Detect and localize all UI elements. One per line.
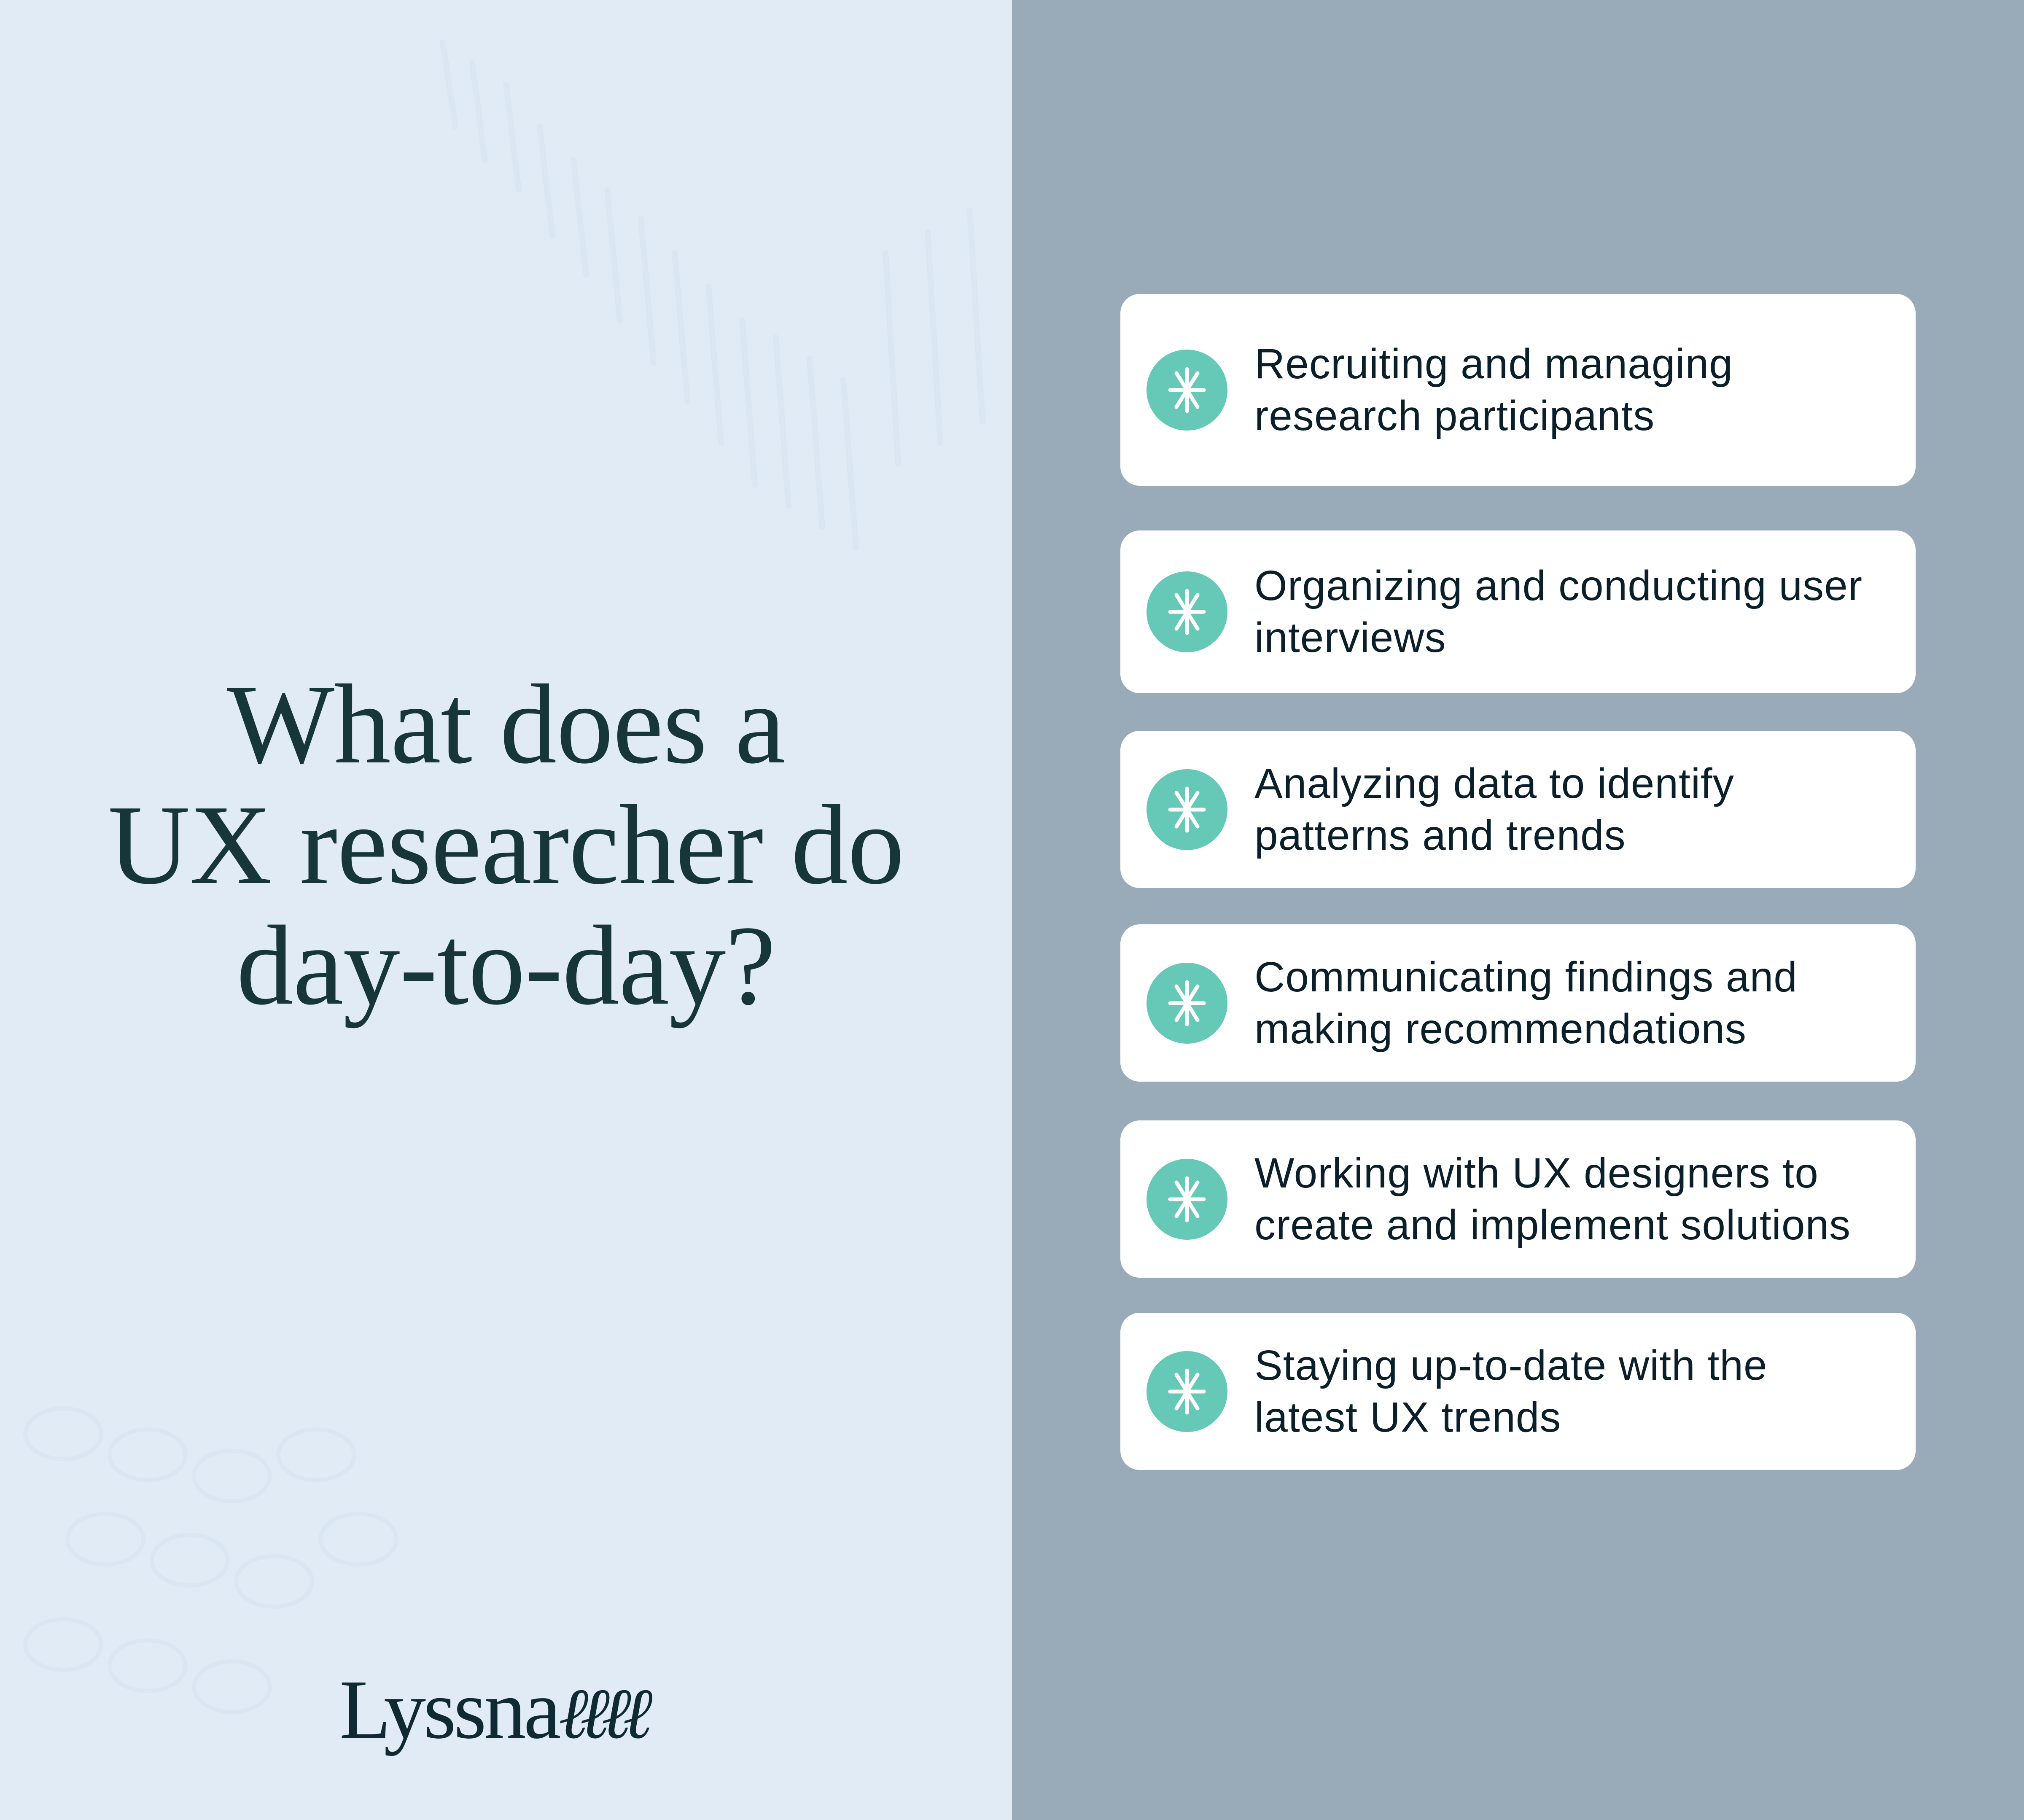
- text: Working with UX designers to: [1254, 1150, 1819, 1197]
- icon: asterisk: [1147, 962, 1227, 1043]
- text: [1254, 757, 1734, 861]
- text: create and implement solutions: [1254, 1201, 1851, 1248]
- card 5: [1120, 1120, 1916, 1278]
- text: Staying up-to-date with the: [1254, 1342, 1768, 1389]
- decorative hatch pattern: [0, 0, 1012, 1820]
- title: What does a: [227, 661, 785, 787]
- left panel: [0, 0, 1012, 1820]
- text: [1254, 560, 1863, 664]
- text: [1254, 338, 1733, 442]
- text: making recommendations: [1254, 1005, 1747, 1053]
- icon: asterisk: [1147, 1351, 1227, 1432]
- card 6: [1120, 1313, 1916, 1470]
- text: Recruiting and managing: [1254, 340, 1733, 387]
- text: research participants: [1254, 392, 1655, 439]
- logo: Lyssnaℓℓℓℓ: [339, 1663, 644, 1756]
- icon: asterisk: [1147, 571, 1227, 652]
- icon: asterisk: [1147, 769, 1227, 850]
- card 4: [1120, 924, 1916, 1082]
- text: [1254, 951, 1798, 1055]
- text: patterns and trends: [1254, 811, 1626, 859]
- icon: asterisk: [1147, 1159, 1227, 1240]
- card 2: [1120, 530, 1916, 693]
- text: [1254, 1147, 1851, 1251]
- title: [0, 664, 1012, 1026]
- card 1: [1120, 294, 1916, 486]
- text: Organizing and conducting user: [1254, 562, 1863, 609]
- card 3: [1120, 731, 1916, 888]
- text: Analyzing data to identify: [1254, 760, 1734, 807]
- title: UX researcher do: [108, 782, 904, 908]
- text: interviews: [1254, 614, 1446, 661]
- text: [1254, 1339, 1768, 1443]
- text: Communicating findings and: [1254, 953, 1798, 1000]
- title: day-to-day?: [237, 902, 775, 1028]
- icon: asterisk: [1147, 349, 1227, 430]
- text: latest UX trends: [1254, 1393, 1561, 1440]
